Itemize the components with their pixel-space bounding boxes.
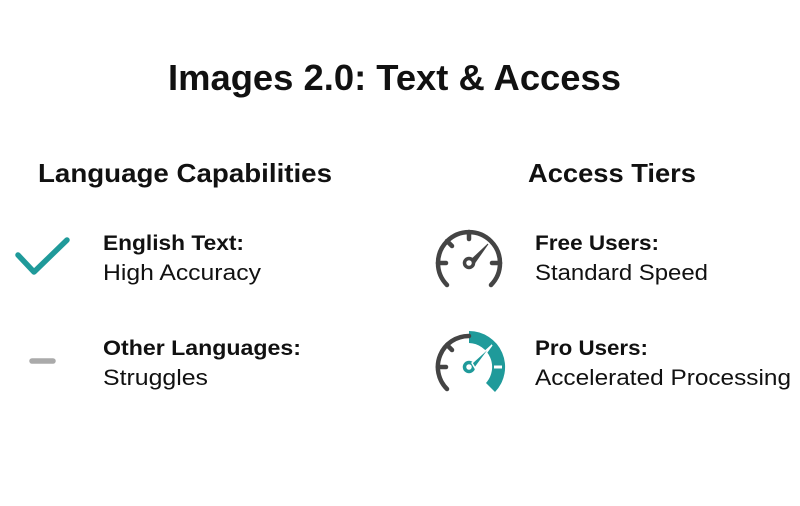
heading: access tiers: Access Tiers [528, 158, 696, 188]
title: Images 2.0: Text & Access [168, 57, 621, 98]
item: pro users: Pro Users: [535, 337, 648, 360]
item: english text [103, 232, 261, 285]
item: english text: High Accuracy [103, 260, 261, 285]
item: pro users: Accelerated Processing [535, 365, 791, 390]
heading: language capabilities: Language Capabilities [38, 158, 332, 188]
item: pro users [535, 337, 791, 390]
item: other languages: Other Languages: [103, 337, 301, 360]
icon: gauge standard [438, 232, 500, 285]
icon: check mark [18, 240, 67, 272]
icon: gauge accelerated [438, 331, 505, 392]
item: other languages: Struggles [103, 365, 208, 390]
item: english text: English Text: [103, 232, 244, 255]
item: free users: Free Users: [535, 232, 659, 255]
item: free users: Standard Speed [535, 260, 708, 285]
icon: dash [32, 358, 53, 364]
item: other languages [103, 337, 301, 390]
item: free users [535, 232, 708, 285]
